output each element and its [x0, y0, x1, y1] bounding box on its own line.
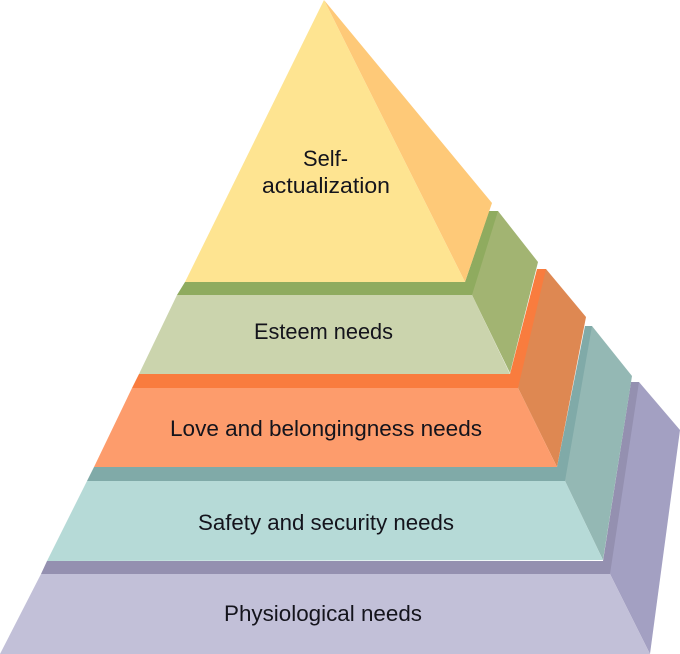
tier 5: physiological needs: [0, 382, 680, 654]
label: physiological needs: Physiological needs: [224, 601, 422, 626]
label: love and belongingness needs: Love and belongingness needs: [170, 416, 482, 441]
label: esteem needs: Esteem needs: [254, 319, 393, 344]
label: self-actualization: actualization: [262, 173, 390, 198]
tier 4: safety and security needs: [47, 326, 632, 561]
tier 3: love and belongingness needs: [94, 269, 586, 467]
tier 2: esteem needs: [139, 211, 538, 374]
label: safety and security needs: Safety and security needs: [198, 510, 454, 535]
tier 1: self-actualization: [185, 0, 492, 282]
label: self-actualization: Self-: [303, 146, 348, 171]
